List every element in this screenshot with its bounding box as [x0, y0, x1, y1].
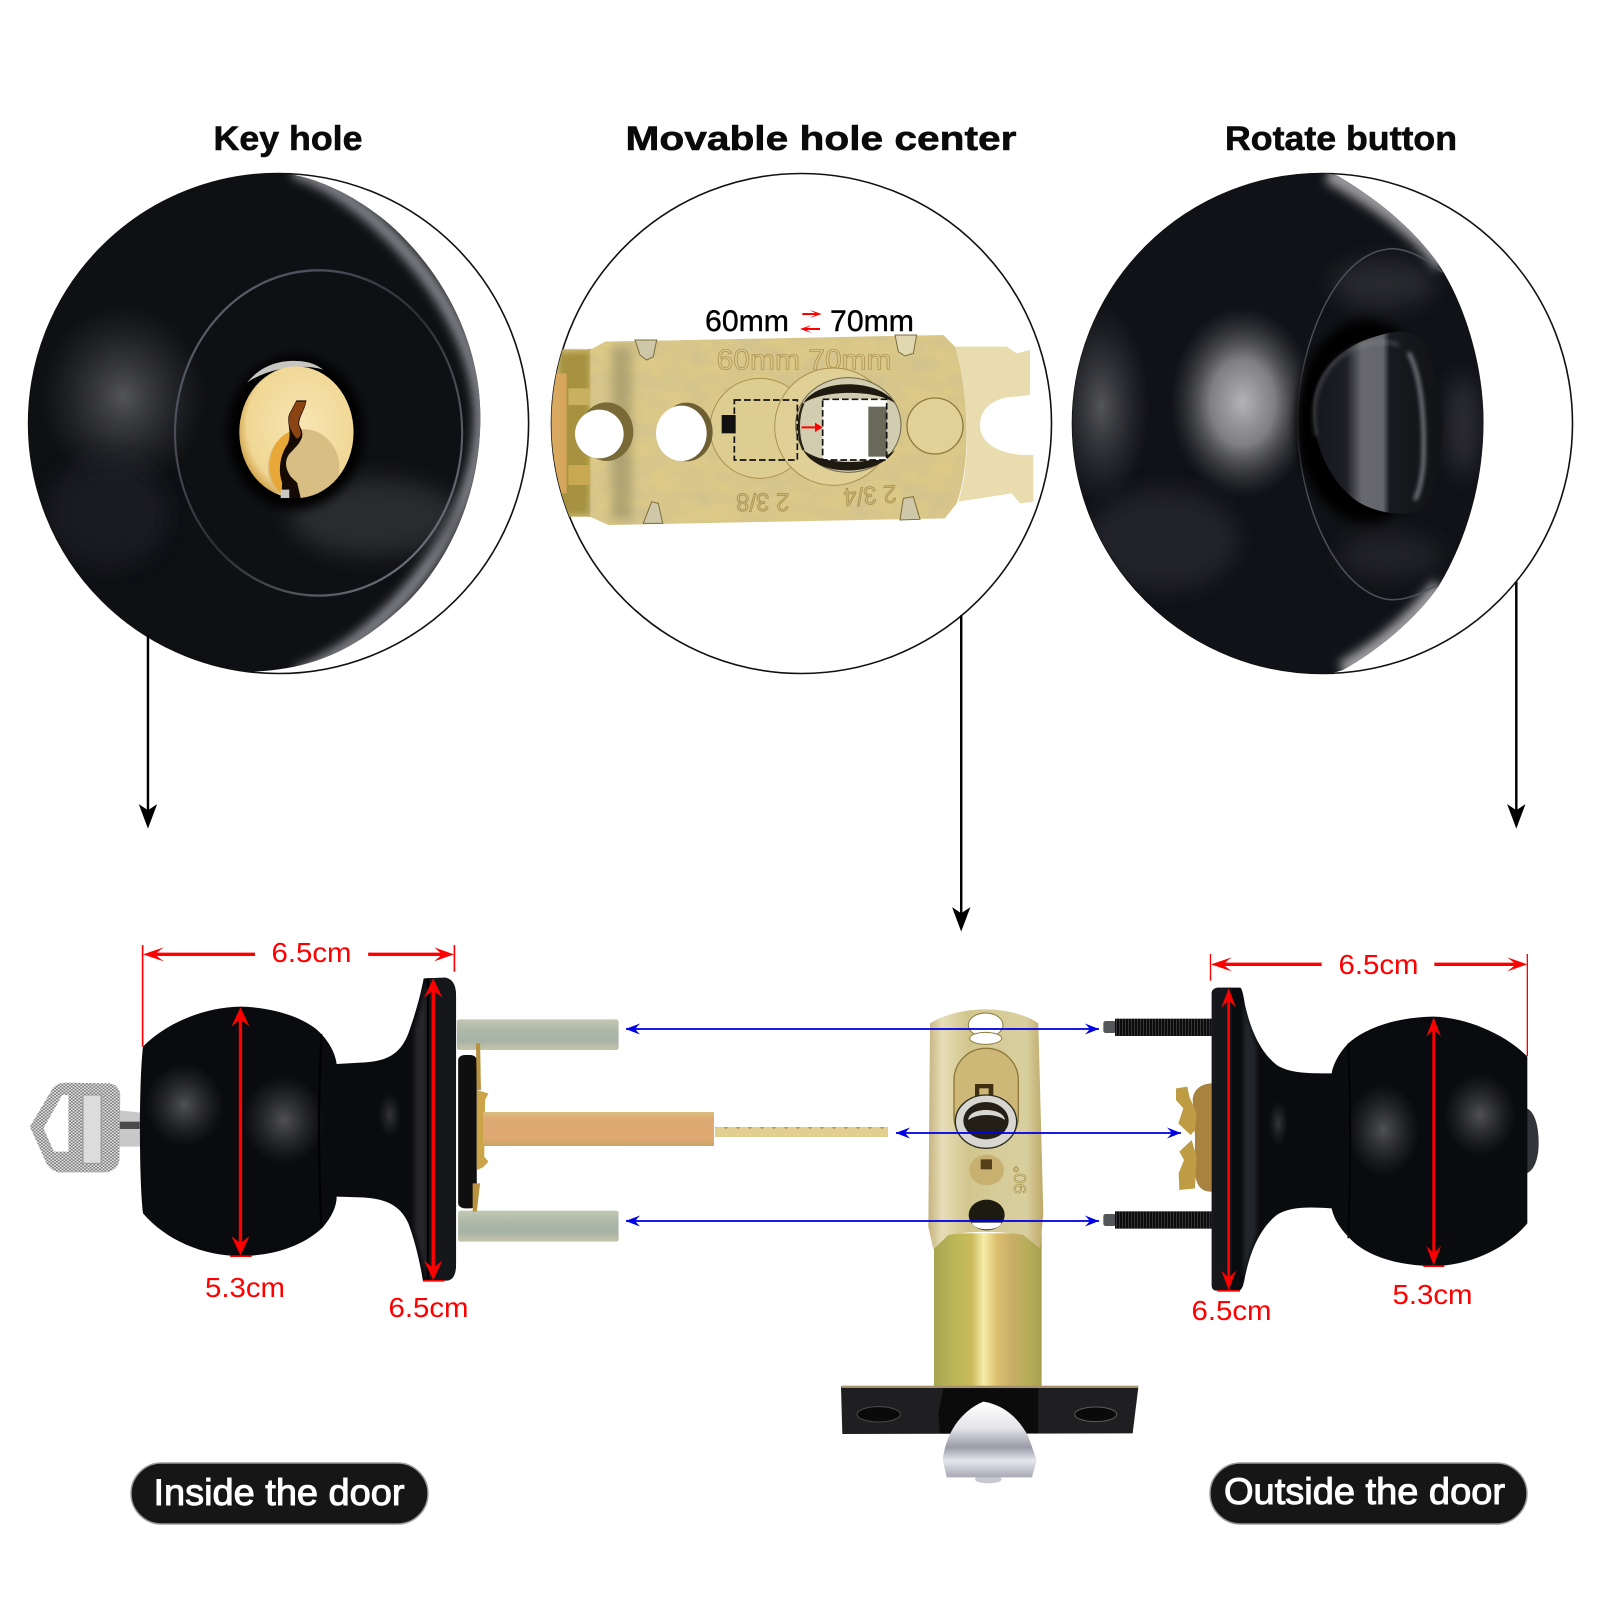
lock shadow — [228, 356, 364, 509]
turn button left edge — [1314, 342, 1399, 437]
hole 1 rim — [580, 402, 633, 461]
ring interior — [963, 1102, 1009, 1139]
ball height arrow — [1423, 1016, 1444, 1267]
dimension: outside knob red marks — [1210, 954, 1528, 1292]
left edge orange — [550, 373, 567, 493]
pill: Inside the door — [131, 1463, 428, 1524]
plug — [268, 429, 339, 506]
faceplate screw hole left — [857, 1407, 900, 1422]
panel: movable hole center close-up — [550, 174, 1052, 674]
knob body — [29, 173, 480, 672]
silver ring — [955, 1095, 1017, 1148]
upper slit — [970, 1032, 1002, 1044]
left arrow — [800, 325, 820, 333]
plate mottling — [550, 333, 980, 527]
latch bolt nub — [975, 1475, 1002, 1483]
square spindle bar — [483, 1112, 714, 1146]
thin tail — [715, 1127, 888, 1137]
faceplate top edge — [842, 1386, 1138, 1388]
left bulge — [710, 378, 791, 479]
rosette height arrow — [423, 977, 444, 1282]
embossed 90 degrees: 90° — [1010, 1166, 1030, 1194]
label: outside rosette 6.5cm: 6.5cm — [1192, 1295, 1272, 1326]
top clip right — [895, 335, 917, 356]
brass nut — [1176, 1083, 1212, 1192]
heading: Movable hole center: Movable hole center — [626, 120, 1016, 158]
plate left tabs — [552, 348, 592, 518]
dashed square at 70mm — [823, 399, 887, 460]
clip top — [476, 1043, 481, 1090]
key shank — [116, 1110, 141, 1147]
latch cylinder — [934, 1233, 1042, 1387]
embossed 2 3/4: 2 3/4 — [842, 479, 898, 511]
lower wing — [1179, 1140, 1197, 1190]
label: outside ball 5.3cm: 5.3cm — [1392, 1279, 1472, 1310]
knob body — [1072, 173, 1484, 673]
outside knob assembly — [1103, 988, 1539, 1291]
silver crescent — [247, 361, 323, 382]
screw tip — [1103, 1021, 1116, 1033]
lower screw — [1103, 1211, 1212, 1229]
faceplate — [841, 1387, 1138, 1434]
arrow: rotate button to outside knob — [1507, 582, 1525, 829]
edge darkening left — [560, 353, 588, 513]
key slot — [280, 400, 306, 498]
pill: Outside the door — [1210, 1463, 1527, 1524]
square cut — [975, 1084, 993, 1098]
blue arrow: spindle alignment — [896, 1128, 1181, 1138]
key bow hole — [44, 1095, 68, 1152]
square opening — [823, 399, 887, 460]
faceplate screw hole right — [1075, 1407, 1117, 1422]
black slot — [722, 415, 736, 433]
circle outline — [552, 174, 1052, 674]
screw thread — [1115, 1211, 1212, 1229]
knob face with keyhole — [29, 171, 480, 674]
lower pin — [458, 1211, 619, 1242]
plate tail — [955, 347, 1033, 503]
label: 60mm: 60mm — [705, 305, 789, 338]
rosette height arrow — [1217, 987, 1240, 1292]
bottom dark crescent — [803, 450, 895, 470]
left dark edge — [799, 403, 803, 450]
ball height arrow — [230, 1006, 252, 1257]
pill: Outside the door: Outside the door — [1224, 1471, 1505, 1512]
lower round inner — [981, 1159, 992, 1169]
turn button right edge — [1408, 353, 1424, 500]
latch sleeve — [938, 1388, 1038, 1433]
label: inside width 6.5cm: 6.5cm — [272, 937, 352, 968]
pill: Inside the door: Inside the door — [154, 1472, 404, 1513]
inside pins — [457, 1019, 619, 1242]
dish rim — [1298, 249, 1442, 600]
embossed text 60mm 70mm: 60mm 70mm — [717, 344, 892, 376]
key bow — [30, 1083, 120, 1172]
panel: key hole knob close-up — [29, 171, 529, 674]
heading: Key hole: Key hole — [214, 120, 362, 158]
width ticks — [1210, 954, 1528, 1056]
red swap arrows — [800, 310, 822, 333]
latch plate — [550, 333, 1033, 527]
hole 1 opening — [575, 410, 624, 458]
slot copper highlight — [289, 402, 306, 439]
dimension: inside knob red marks — [142, 945, 455, 1282]
label: outside width 6.5cm: 6.5cm — [1338, 949, 1418, 980]
right circle emboss — [907, 398, 963, 454]
inner ring rim — [175, 270, 462, 596]
circle outline — [29, 174, 529, 674]
label: inside rosette 6.5cm: 6.5cm — [388, 1292, 468, 1323]
upper pin — [457, 1019, 619, 1050]
knob: outside of the door — [1212, 988, 1527, 1291]
spring and clips — [458, 1043, 488, 1212]
key bow slot — [83, 1095, 101, 1163]
plate body — [590, 335, 967, 525]
width arrow right — [368, 947, 454, 961]
hole 2 opening — [656, 406, 707, 461]
lower round emboss — [969, 1155, 1004, 1185]
lower hole — [969, 1200, 1005, 1230]
knob shading — [1053, 173, 1480, 670]
knob silhouette — [1212, 988, 1527, 1291]
tabs brass blocks lower — [568, 465, 590, 485]
seam line — [1348, 1043, 1350, 1238]
dark side of opening — [868, 407, 887, 457]
width ticks — [142, 945, 455, 1047]
slide ring — [796, 378, 901, 472]
nut body — [1193, 1083, 1212, 1192]
ring shine — [968, 1110, 1005, 1120]
dashed square at 60mm — [734, 400, 797, 460]
blue arrow: lower screw alignment — [626, 1216, 1099, 1226]
top clips — [635, 340, 657, 360]
tabs brass blocks — [568, 388, 590, 405]
inside knob assembly — [30, 1019, 619, 1242]
slot pin — [281, 490, 289, 498]
clip bottom — [473, 1183, 480, 1212]
bottom clip left — [643, 502, 663, 523]
brass disc — [239, 366, 354, 498]
knob: inside of the door — [140, 977, 459, 1282]
knob shading — [145, 977, 459, 1282]
hole 2 rim — [672, 402, 713, 462]
button shadow — [1296, 320, 1437, 523]
blue arrow: upper screw alignment — [626, 1024, 1099, 1034]
knob face with turn button — [1053, 173, 1484, 673]
seam line — [319, 1034, 321, 1228]
turn button nub — [1527, 1108, 1539, 1173]
red arrow to opening — [802, 423, 823, 432]
label: 70mm: 70mm — [830, 305, 914, 338]
knob silhouette — [140, 978, 456, 1281]
screw tip — [1103, 1214, 1116, 1226]
circle outline — [1072, 174, 1572, 674]
width arrow left — [1211, 957, 1322, 971]
latch bolt — [943, 1402, 1037, 1477]
arrow: key hole to inside knob — [139, 635, 157, 829]
turn button — [1313, 331, 1441, 514]
right arrow — [802, 310, 822, 318]
oval slot — [954, 1048, 1018, 1148]
gold bracket — [477, 1090, 488, 1170]
key — [30, 1083, 141, 1172]
top dark crescent — [803, 384, 895, 403]
square cut inner — [979, 1088, 989, 1096]
spring coil — [458, 1055, 477, 1208]
upper screw — [1103, 1019, 1212, 1036]
width arrow left — [143, 947, 255, 961]
embossed 2 3/8: 2 3/8 — [736, 487, 789, 515]
latch assembly — [841, 1009, 1138, 1483]
spindle — [483, 1112, 888, 1146]
label: inside ball 5.3cm: 5.3cm — [205, 1272, 285, 1303]
screw thread — [1115, 1019, 1212, 1036]
width arrow right — [1434, 957, 1527, 971]
top hole — [968, 1013, 1003, 1037]
centre bulge — [775, 368, 892, 485]
knob shading — [41, 171, 480, 674]
heading: Rotate button: Rotate button — [1225, 120, 1457, 158]
lower hole gap — [972, 1223, 1002, 1229]
latch housing plate — [928, 1009, 1043, 1249]
panel: rotate button knob close-up — [1053, 173, 1572, 673]
upper wing — [1176, 1087, 1197, 1135]
knob shading — [1212, 988, 1517, 1291]
arrow: hole center to latch — [952, 615, 970, 932]
brass lock cylinder — [239, 366, 354, 506]
key shank shadow — [118, 1122, 140, 1129]
bottom clip right — [900, 497, 920, 520]
